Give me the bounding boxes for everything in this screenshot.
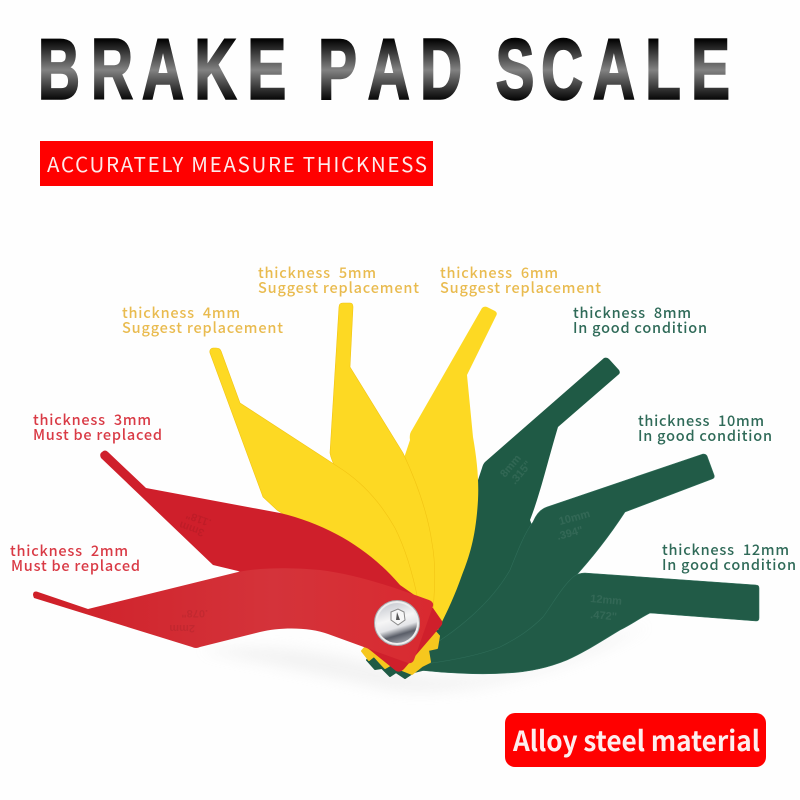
blade: 10mm green xyxy=(425,454,714,665)
label: 10mm: thickness 10mm xyxy=(638,410,764,431)
label: 8mm: In good condition xyxy=(573,317,707,338)
label: 10mm: In good condition xyxy=(638,425,772,446)
label: 6mm xyxy=(440,262,601,298)
label: 8mm: thickness 8mm xyxy=(573,302,691,323)
stamped size marks xyxy=(169,508,213,634)
label: 6mm: Suggest replacement xyxy=(440,277,601,298)
label: 5mm: Suggest replacement xyxy=(258,277,419,298)
label: 10mm xyxy=(638,410,772,446)
label: 3mm: thickness 3mm xyxy=(33,409,151,430)
soft shadow xyxy=(200,625,650,692)
label: 12mm xyxy=(662,539,796,575)
gauge fan: .472" xyxy=(590,609,617,623)
stamped size marks: 3mm xyxy=(178,518,206,538)
bolt xyxy=(374,600,420,646)
label: 3mm: Must be replaced xyxy=(33,424,162,445)
hub: yellow scalloped ends xyxy=(362,615,439,674)
label: 12mm: thickness 12mm xyxy=(662,539,789,560)
blade: 12mm green xyxy=(418,573,759,674)
title: BRAKE PAD SCALE xyxy=(38,22,730,117)
label: 4mm: thickness 4mm xyxy=(122,302,240,323)
blade: 8mm green xyxy=(420,358,620,652)
stamped size marks: .118" xyxy=(184,508,213,528)
label: 2mm xyxy=(10,540,140,576)
blade: 2mm red xyxy=(33,568,433,663)
label: 5mm: thickness 5mm xyxy=(258,262,376,283)
hub: green scalloped ends xyxy=(367,640,440,678)
label: 5mm xyxy=(258,262,419,298)
label: 8mm xyxy=(573,302,707,338)
label: 12mm: In good condition xyxy=(662,554,796,575)
blade: 4mm yellow xyxy=(210,348,418,605)
subtitle banner: ACCURATELY MEASURE THICKNESS xyxy=(47,148,427,178)
blade: 6mm yellow xyxy=(400,307,497,630)
gauge fan xyxy=(33,303,759,678)
label: 4mm: Suggest replacement xyxy=(122,317,283,338)
label: 3mm xyxy=(33,409,162,445)
material badge: Alloy steel material xyxy=(512,720,760,760)
label: 6mm: thickness 6mm xyxy=(440,262,558,283)
gauge fan: 10mm xyxy=(558,508,592,528)
stamped size marks: 2mm xyxy=(169,622,195,634)
material badge xyxy=(505,713,766,767)
gauge fan: .394" xyxy=(556,524,584,543)
gauge fan: 12mm xyxy=(590,593,623,608)
gauge fan: 8mm xyxy=(498,452,524,480)
label: 2mm: thickness 2mm xyxy=(10,540,128,561)
blade: 3mm red xyxy=(100,450,442,672)
label: 4mm xyxy=(122,302,283,338)
stamped size marks: .078" xyxy=(181,607,208,619)
label: 2mm: Must be replaced xyxy=(11,555,140,576)
subtitle banner xyxy=(40,141,433,186)
blade: 5mm yellow xyxy=(330,303,435,612)
gauge fan: .315" xyxy=(508,459,534,487)
